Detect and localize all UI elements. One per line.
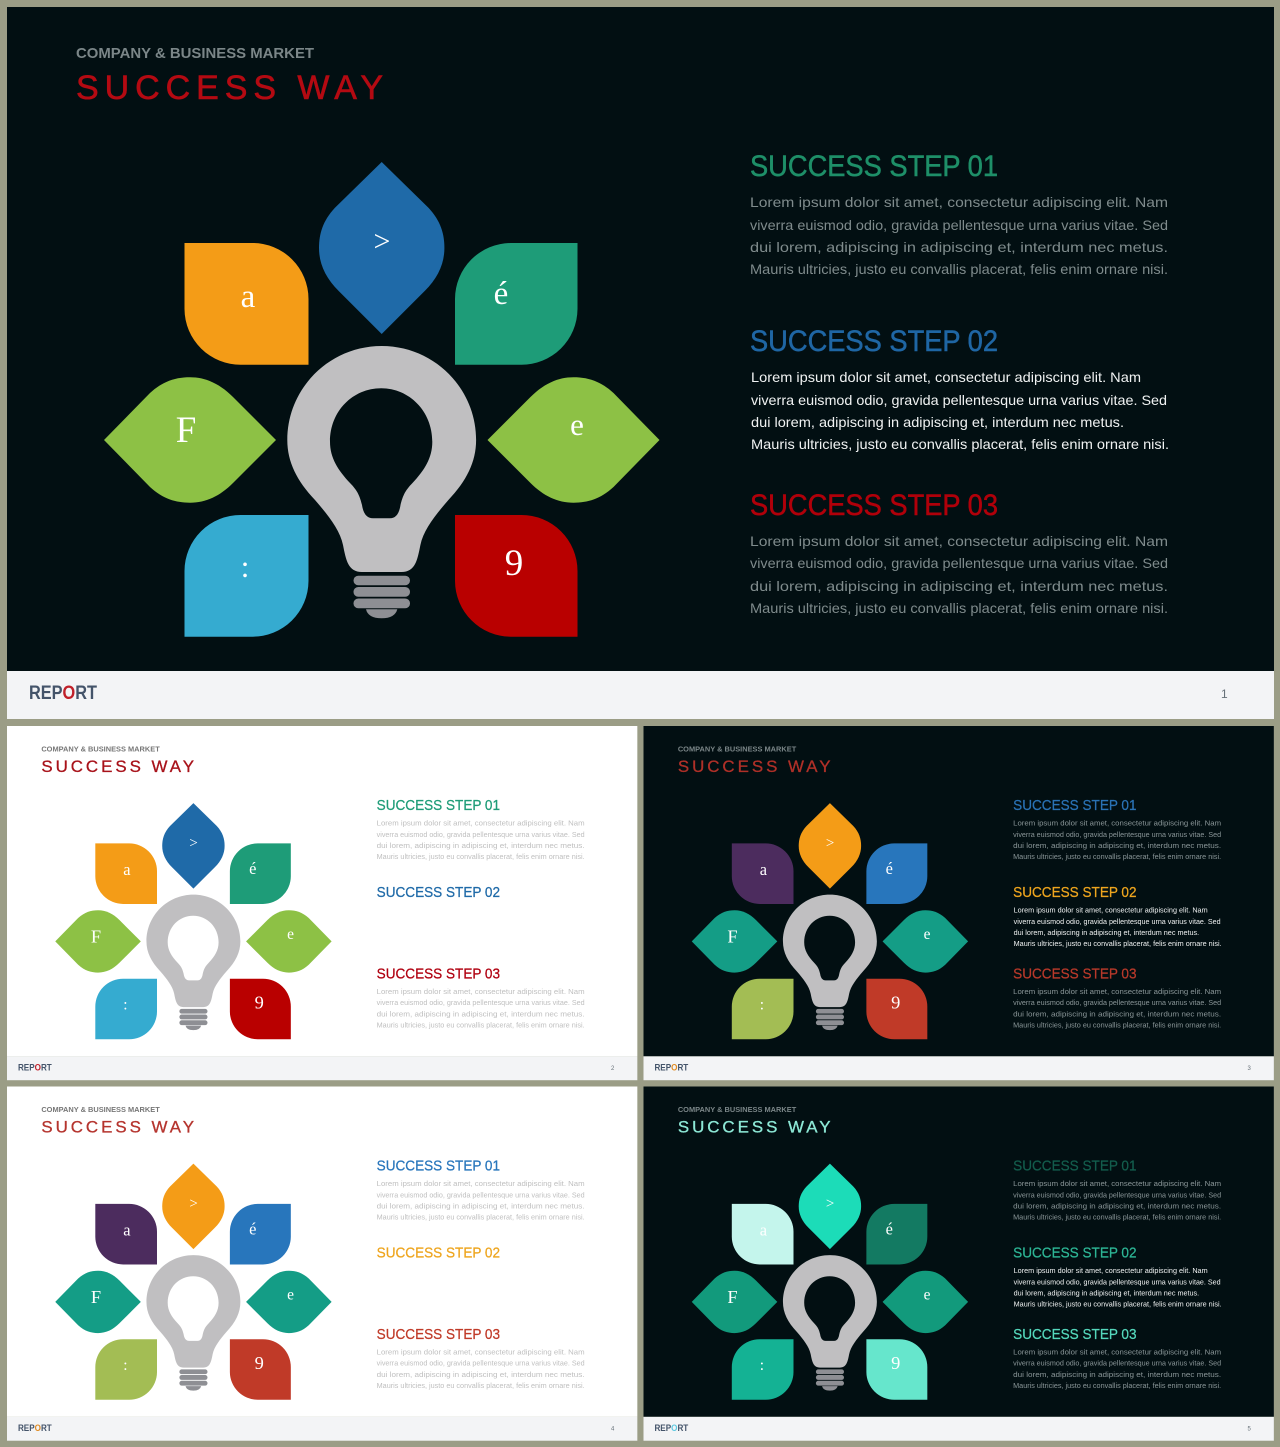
slide 1: main dark slide xyxy=(7,7,1274,719)
step 3 body xyxy=(377,989,585,1029)
petal: top xyxy=(799,1164,861,1249)
step 2 body: Lorem ipsum dolor sit amet, consectetur adipiscing elit. Nam xyxy=(1014,908,1208,915)
step 3 body: Mauris ultricies, justo eu convallis placerat, felis enim ornare nisi. xyxy=(377,1383,585,1390)
step 1 body: dui lorem, adipiscing in adipiscing et, interdum nec metus. xyxy=(377,1203,585,1210)
step 2 body xyxy=(1014,908,1222,948)
petal: left xyxy=(55,1271,141,1333)
slide 3 background xyxy=(644,726,1274,1056)
step 3 body: dui lorem, adipiscing in adipiscing et, interdum nec metus. xyxy=(1013,1372,1221,1379)
step 1 heading: SUCCESS STEP 01 xyxy=(1013,1158,1137,1175)
petal: lower right: 9 xyxy=(505,543,523,584)
step 3 heading: SUCCESS STEP 03 xyxy=(1013,966,1137,983)
petal: top xyxy=(162,1164,225,1249)
slide 2 footer brand: REPORT xyxy=(18,1062,52,1073)
petal: lower right xyxy=(230,979,291,1039)
step 3 body: viverra euismod odio, gravida pellentesque urna varius vitae. Sed xyxy=(1013,1000,1221,1007)
icon: light bulb xyxy=(783,1255,877,1391)
step 2 body: Mauris ultricies, justo eu convallis placerat, felis enim ornare nisi. xyxy=(1014,1301,1222,1308)
petal: upper right: é xyxy=(249,1219,256,1238)
step 1 body xyxy=(1013,1181,1221,1221)
petal: top: > xyxy=(826,835,834,851)
step 2 body: Mauris ultricies, justo eu convallis placerat, felis enim ornare nisi. xyxy=(1014,941,1222,948)
step 1 body: Mauris ultricies, justo eu convallis placerat, felis enim ornare nisi. xyxy=(750,261,1168,277)
slide 5 footer brand: REPORT xyxy=(654,1423,688,1434)
petal: left: F xyxy=(91,926,101,946)
step 3 body xyxy=(377,1350,585,1390)
step 1 heading: SUCCESS STEP 01 xyxy=(1013,797,1137,814)
step 1 body: viverra euismod odio, gravida pellentesque urna varius vitae. Sed xyxy=(750,217,1168,233)
petal: lower right xyxy=(866,979,927,1039)
step 1 body xyxy=(1013,820,1221,861)
petal: right xyxy=(883,1271,968,1333)
petal: lower right xyxy=(230,1339,291,1400)
icon: light bulb xyxy=(146,1255,240,1391)
petal: upper right xyxy=(455,243,578,365)
step 1 body: Lorem ipsum dolor sit amet, consectetur adipiscing elit. Nam xyxy=(377,1181,585,1188)
petal: right: e xyxy=(287,1286,294,1303)
slide 1 page number: 1 xyxy=(1221,687,1228,701)
petal: upper right xyxy=(230,1204,291,1264)
step 2 body xyxy=(751,369,1169,452)
step 3 body: dui lorem, adipiscing in adipiscing et, interdum nec metus. xyxy=(1013,1012,1221,1019)
petal: left xyxy=(692,1271,777,1333)
petal: lower left xyxy=(732,979,793,1039)
petal: top xyxy=(162,803,225,889)
petal: lower left: : xyxy=(123,1357,128,1374)
step 3 body: Lorem ipsum dolor sit amet, consectetur adipiscing elit. Nam xyxy=(1013,989,1221,996)
petal: left xyxy=(104,377,276,503)
slide 5 title: SUCCESS WAY xyxy=(678,1117,831,1136)
step 1 body: Mauris ultricies, justo eu convallis placerat, felis enim ornare nisi. xyxy=(1013,854,1221,861)
slide 4: white variant xyxy=(7,1086,637,1441)
slide 5 page number: 5 xyxy=(1247,1426,1251,1432)
petal: upper right xyxy=(866,843,927,904)
petal: lower left xyxy=(732,1339,793,1400)
slide 1 footer bar xyxy=(7,671,1274,719)
petal: upper left xyxy=(732,843,793,904)
step 1 body: dui lorem, adipiscing in adipiscing et, interdum nec metus. xyxy=(377,843,585,850)
step 2 heading: SUCCESS STEP 02 xyxy=(750,325,998,358)
step 2 block xyxy=(1013,884,1222,948)
slide 4 subtitle: COMPANY & BUSINESS MARKET xyxy=(41,1105,160,1114)
step 1 block xyxy=(1013,1158,1221,1221)
petal: right: e xyxy=(287,926,294,943)
step 1 body xyxy=(377,1181,585,1221)
step 3 body: Lorem ipsum dolor sit amet, consectetur adipiscing elit. Nam xyxy=(750,533,1168,549)
petal: top: > xyxy=(189,835,198,851)
petal: upper left: a xyxy=(760,860,768,879)
step 1 body: Mauris ultricies, justo eu convallis placerat, felis enim ornare nisi. xyxy=(377,854,585,861)
slide 3 subtitle: COMPANY & BUSINESS MARKET xyxy=(678,744,797,753)
slide 1 subtitle: COMPANY & BUSINESS MARKET xyxy=(76,45,314,62)
petal: upper left: a xyxy=(123,1221,131,1240)
petal: top xyxy=(799,803,861,889)
petal: lower left: : xyxy=(760,1357,764,1374)
slide 1 background xyxy=(7,7,1274,671)
step 1 body: Mauris ultricies, justo eu convallis placerat, felis enim ornare nisi. xyxy=(1013,1214,1221,1221)
icon: light bulb xyxy=(146,895,240,1030)
petal: lower right: 9 xyxy=(891,1353,900,1373)
petal: left: F xyxy=(727,1287,738,1307)
step 2 heading: SUCCESS STEP 02 xyxy=(1013,884,1137,901)
petal: top: > xyxy=(374,225,390,258)
step 1 body: Lorem ipsum dolor sit amet, consectetur adipiscing elit. Nam xyxy=(377,821,585,828)
petal: upper left: a xyxy=(241,279,256,315)
petal: lower right xyxy=(455,515,578,637)
slide 3 footer bar xyxy=(644,1056,1274,1080)
step 2 body: dui lorem, adipiscing in adipiscing et, interdum nec metus. xyxy=(751,414,1124,430)
petal: left: F xyxy=(176,410,196,451)
petal: upper right: é xyxy=(886,859,893,878)
step 3 body xyxy=(1013,989,1221,1029)
slide 2 petal diagram xyxy=(55,803,332,1039)
slide 4 title: SUCCESS WAY xyxy=(41,1117,194,1136)
slide 2 page number: 2 xyxy=(611,1066,615,1072)
step 3 body: Mauris ultricies, justo eu convallis placerat, felis enim ornare nisi. xyxy=(1013,1383,1221,1390)
step 3 body: viverra euismod odio, gravida pellentesque urna varius vitae. Sed xyxy=(1013,1361,1221,1368)
petal: top: > xyxy=(189,1196,198,1212)
petal: lower right: 9 xyxy=(255,1353,264,1373)
slide 4 petal diagram xyxy=(55,1164,332,1400)
slide 2 footer bar xyxy=(7,1056,637,1080)
slide 5 subtitle: COMPANY & BUSINESS MARKET xyxy=(678,1105,797,1114)
step 3 heading: SUCCESS STEP 03 xyxy=(377,1326,500,1343)
step 2 heading: SUCCESS STEP 02 xyxy=(377,884,500,901)
step 2 body: Lorem ipsum dolor sit amet, consectetur adipiscing elit. Nam xyxy=(1014,1268,1208,1275)
petal: upper left xyxy=(732,1204,793,1264)
petal: lower left xyxy=(95,979,157,1039)
petal: right xyxy=(246,1271,332,1333)
slide 4 footer brand: REPORT xyxy=(18,1423,52,1434)
step 1 heading: SUCCESS STEP 01 xyxy=(377,1158,500,1175)
step 2 body: viverra euismod odio, gravida pellentesque urna varius vitae. Sed xyxy=(751,392,1167,408)
step 3 body: Mauris ultricies, justo eu convallis placerat, felis enim ornare nisi. xyxy=(750,600,1168,616)
step 2 body: dui lorem, adipiscing in adipiscing et, interdum nec metus. xyxy=(1014,1290,1199,1297)
step 1 heading: SUCCESS STEP 01 xyxy=(750,150,998,183)
step 2 body: dui lorem, adipiscing in adipiscing et, interdum nec metus. xyxy=(1014,930,1199,937)
petal: right: e xyxy=(924,1286,931,1303)
step 3 body: Lorem ipsum dolor sit amet, consectetur adipiscing elit. Nam xyxy=(377,1350,585,1357)
petal: lower left: : xyxy=(760,997,764,1014)
step 2 body: Lorem ipsum dolor sit amet, consectetur adipiscing elit. Nam xyxy=(751,369,1141,385)
petal: left xyxy=(55,910,141,973)
petal: upper left: a xyxy=(123,860,131,879)
slide 1 petal diagram xyxy=(104,162,660,637)
petal: top: > xyxy=(826,1196,834,1212)
slide 4 background xyxy=(7,1086,637,1417)
step 1 block xyxy=(1013,797,1221,861)
step 2 body: Mauris ultricies, justo eu convallis placerat, felis enim ornare nisi. xyxy=(751,436,1169,452)
petal: upper right xyxy=(230,843,291,904)
step 3 heading: SUCCESS STEP 03 xyxy=(750,489,998,522)
step 1 body: Lorem ipsum dolor sit amet, consectetur adipiscing elit. Nam xyxy=(1013,821,1221,828)
slide 2 subtitle: COMPANY & BUSINESS MARKET xyxy=(41,744,160,753)
step 2 body: viverra euismod odio, gravida pellentesque urna varius vitae. Sed xyxy=(1014,919,1221,926)
step 1 body: Mauris ultricies, justo eu convallis placerat, felis enim ornare nisi. xyxy=(377,1214,585,1221)
step 3 body: viverra euismod odio, gravida pellentesque urna varius vitae. Sed xyxy=(750,555,1168,571)
step 1 body: viverra euismod odio, gravida pellentesque urna varius vitae. Sed xyxy=(1013,832,1221,839)
step 3 body: dui lorem, adipiscing in adipiscing et, interdum nec metus. xyxy=(750,578,1168,594)
step 3 body: viverra euismod odio, gravida pellentesque urna varius vitae. Sed xyxy=(377,1361,585,1368)
petal: upper left xyxy=(184,243,308,365)
step 2 heading: SUCCESS STEP 02 xyxy=(1013,1245,1137,1262)
petal: lower left xyxy=(184,515,308,637)
step 1 body xyxy=(377,820,585,861)
slide 5 petal diagram xyxy=(692,1164,968,1400)
petal: right xyxy=(883,910,968,973)
step 3 body: Lorem ipsum dolor sit amet, consectetur adipiscing elit. Nam xyxy=(377,989,585,996)
step 3 heading: SUCCESS STEP 03 xyxy=(377,966,500,983)
slide 5 background xyxy=(644,1086,1274,1417)
step 1 body: viverra euismod odio, gravida pellentesque urna varius vitae. Sed xyxy=(377,832,585,839)
step 1 body: dui lorem, adipiscing in adipiscing et, interdum nec metus. xyxy=(1013,1203,1221,1210)
step 3 block xyxy=(750,489,1168,616)
petal: upper right xyxy=(866,1204,927,1264)
step 3 body: dui lorem, adipiscing in adipiscing et, interdum nec metus. xyxy=(377,1012,585,1019)
petal: lower left xyxy=(95,1339,157,1400)
slide 4 footer bar xyxy=(7,1417,637,1441)
slide 3: dark variant xyxy=(644,726,1274,1080)
step 3 block xyxy=(1013,966,1221,1029)
petal: left: F xyxy=(727,926,738,946)
step 1 body: Lorem ipsum dolor sit amet, consectetur adipiscing elit. Nam xyxy=(1013,1181,1221,1188)
step 1 body: viverra euismod odio, gravida pellentesque urna varius vitae. Sed xyxy=(377,1192,585,1199)
step 3 body: Mauris ultricies, justo eu convallis placerat, felis enim ornare nisi. xyxy=(377,1022,585,1029)
petal: upper left xyxy=(95,843,157,904)
petal: lower right: 9 xyxy=(891,993,900,1013)
step 3 body: viverra euismod odio, gravida pellentesque urna varius vitae. Sed xyxy=(377,1000,585,1007)
step 3 block xyxy=(1013,1326,1221,1390)
step 1 block xyxy=(377,797,585,861)
petal: right xyxy=(246,910,332,973)
step 2 block xyxy=(1013,1245,1222,1308)
slide 3 title: SUCCESS WAY xyxy=(678,757,831,776)
step 1 body: dui lorem, adipiscing in adipiscing et, interdum nec metus. xyxy=(750,239,1168,255)
slide 5: dark teal variant xyxy=(644,1086,1274,1441)
step 3 body: Lorem ipsum dolor sit amet, consectetur adipiscing elit. Nam xyxy=(1013,1350,1221,1357)
slide 2 title: SUCCESS WAY xyxy=(41,757,194,776)
step 2 body xyxy=(1014,1268,1222,1308)
step 1 body: viverra euismod odio, gravida pellentesque urna varius vitae. Sed xyxy=(1013,1192,1221,1199)
icon: light bulb xyxy=(287,346,476,618)
step 3 body xyxy=(750,533,1168,616)
petal: upper left xyxy=(95,1204,157,1264)
slide 2: white variant xyxy=(7,726,637,1080)
icon: light bulb xyxy=(783,895,877,1030)
step 1 body: Lorem ipsum dolor sit amet, consectetur adipiscing elit. Nam xyxy=(750,194,1168,210)
slide 4 page number: 4 xyxy=(611,1426,615,1432)
petal: right: e xyxy=(924,926,931,943)
step 3 heading: SUCCESS STEP 03 xyxy=(1013,1326,1137,1343)
petal: left xyxy=(692,910,777,973)
step 1 heading: SUCCESS STEP 01 xyxy=(377,797,500,814)
petal: upper left: a xyxy=(760,1221,768,1240)
petal: top xyxy=(319,162,444,334)
petal: lower left: : xyxy=(123,997,128,1014)
step 3 body: Mauris ultricies, justo eu convallis placerat, felis enim ornare nisi. xyxy=(1013,1022,1221,1029)
step 1 block xyxy=(750,150,1168,277)
step 2 heading: SUCCESS STEP 02 xyxy=(377,1245,500,1262)
petal: left: F xyxy=(91,1287,101,1307)
step 3 body: dui lorem, adipiscing in adipiscing et, interdum nec metus. xyxy=(377,1372,585,1379)
slide 2 background xyxy=(7,726,637,1056)
step 3 block xyxy=(377,1326,585,1390)
slide 3 footer brand: REPORT xyxy=(654,1062,688,1073)
step 1 block xyxy=(377,1158,585,1221)
petal: upper right: é xyxy=(249,859,256,878)
petal: upper right: é xyxy=(494,276,508,312)
step 3 body xyxy=(1013,1350,1221,1390)
slide 1 title: SUCCESS WAY xyxy=(76,69,383,107)
slide 3 page number: 3 xyxy=(1247,1066,1251,1072)
step 2 body: viverra euismod odio, gravida pellentesque urna varius vitae. Sed xyxy=(1014,1280,1221,1287)
slide 1 footer brand: REPORT xyxy=(29,683,97,704)
petal: right xyxy=(488,377,660,503)
petal: lower right: 9 xyxy=(255,993,264,1013)
petal: lower right xyxy=(866,1339,927,1400)
petal: lower left: : xyxy=(241,549,249,584)
step 1 body: dui lorem, adipiscing in adipiscing et, interdum nec metus. xyxy=(1013,843,1221,850)
step 2 block xyxy=(750,325,1169,452)
petal: right: e xyxy=(570,407,584,442)
step 3 block xyxy=(377,966,585,1029)
slide 3 petal diagram xyxy=(692,803,968,1039)
slide 5 footer bar xyxy=(644,1417,1274,1441)
step 1 body xyxy=(750,194,1168,277)
petal: upper right: é xyxy=(886,1219,893,1238)
